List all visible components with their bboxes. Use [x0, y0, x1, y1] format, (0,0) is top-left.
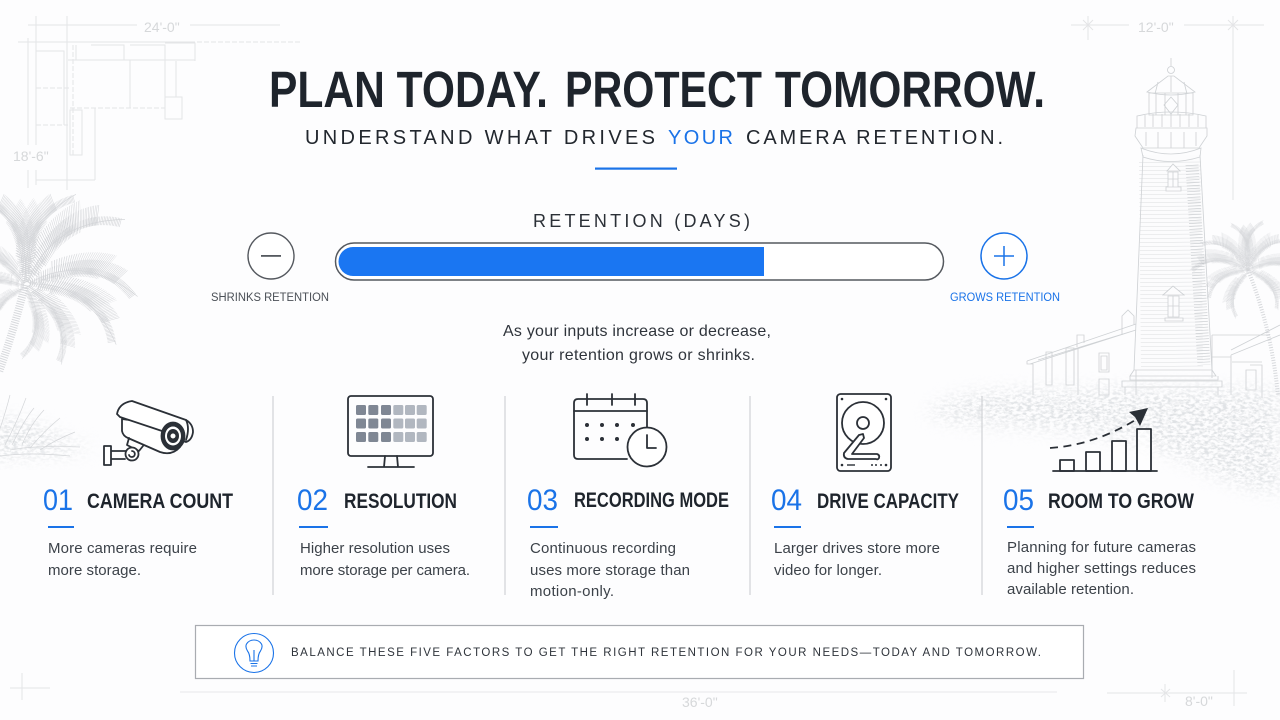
icon: security camera [104, 401, 193, 465]
blueprint sketch: bottom dimensions [10, 670, 1247, 710]
factor 5: room to grow [1003, 408, 1196, 598]
dimension: 8 feet: 8'-0" [1185, 693, 1213, 709]
title: PROTECT [565, 61, 762, 118]
factor 4: drive capacity [771, 394, 959, 579]
heading: RESOLUTION [344, 490, 457, 513]
title: TOMORROW. [775, 61, 1045, 118]
meter track [336, 243, 944, 280]
factor 3: recording mode [527, 394, 729, 600]
description: more storage. [48, 562, 141, 579]
number: 04 [771, 484, 802, 517]
meter label: RETENTION (DAYS) [533, 211, 750, 231]
icon: growth chart [1050, 408, 1157, 471]
callout banner [196, 626, 1084, 678]
explanatory text: As your inputs increase or decrease, [503, 323, 771, 340]
subtitle: YOUR [668, 127, 733, 149]
description: uses more storage than [530, 562, 690, 579]
dimension: 24 feet: 24'-0" [144, 19, 180, 35]
description [1007, 539, 1196, 598]
illustration: right palm tree [1184, 212, 1280, 396]
title accent rule [595, 168, 677, 170]
minus control [248, 233, 294, 279]
illustration: scrub ground [933, 384, 1280, 495]
factor 2: resolution [297, 396, 470, 579]
grows label: GROWS RETENTION [950, 292, 1060, 304]
explanatory text [503, 323, 771, 364]
number: 05 [1003, 484, 1034, 517]
tower [1122, 148, 1222, 395]
explanatory text: your retention grows or shrinks. [522, 347, 755, 364]
subtitle: CAMERA RETENTION. [746, 127, 1003, 149]
blueprint sketch: top left floor plan [13, 16, 300, 190]
description: motion-only. [530, 583, 614, 600]
factor 1: camera count [43, 401, 233, 579]
description: available retention. [1007, 581, 1134, 598]
dimension: 36 feet: 36'-0" [682, 694, 718, 710]
plus control [981, 233, 1027, 279]
icon: light bulb [234, 634, 274, 672]
illustration: left palm tree [0, 174, 150, 372]
title [269, 61, 1045, 118]
description: More cameras require [48, 540, 197, 557]
illustration: lighthouse and buildings [1027, 58, 1280, 398]
description [48, 540, 197, 579]
callout text: BALANCE THESE FIVE FACTORS TO GET THE RIGHT RETENTION FOR YOUR NEEDS—TODAY AND TOMORROW. [291, 647, 1041, 659]
description: Larger drives store more [774, 540, 940, 557]
title: PLAN TODAY. [269, 61, 548, 118]
icon: calendar with clock [574, 394, 666, 466]
description: more storage per camera. [300, 562, 470, 579]
subtitle [305, 127, 1003, 149]
description: Higher resolution uses [300, 540, 450, 557]
right keeper house [1212, 325, 1280, 398]
description [774, 540, 940, 579]
description: Continuous recording [530, 540, 676, 557]
heading: ROOM TO GROW [1048, 490, 1194, 513]
heading: CAMERA COUNT [87, 490, 233, 513]
left keeper house [1027, 310, 1136, 395]
number: 03 [527, 484, 558, 517]
subtitle: UNDERSTAND WHAT DRIVES [305, 127, 655, 149]
tower windows [1163, 164, 1184, 321]
description: and higher settings reduces [1007, 560, 1196, 577]
gallery [1135, 58, 1207, 148]
description: Planning for future cameras [1007, 539, 1196, 556]
shrinks label: SHRINKS RETENTION [211, 292, 329, 304]
dimension: 18 feet 6: 18'-6" [13, 148, 49, 164]
dimension: 12 feet: 12'-0" [1138, 19, 1174, 35]
retention meter [211, 211, 1060, 304]
description: video for longer. [774, 562, 882, 579]
number: 02 [297, 484, 328, 517]
meter fill [338, 247, 764, 276]
description [530, 540, 690, 600]
icon: hard drive [837, 394, 891, 471]
heading: DRIVE CAPACITY [817, 490, 959, 513]
icon: monitor with tile grid [348, 396, 433, 467]
description [300, 540, 470, 579]
number: 01 [43, 484, 73, 517]
heading: RECORDING MODE [574, 489, 729, 512]
illustration: left grasses [0, 395, 80, 463]
blueprint sketch: top right dimension [1071, 16, 1264, 200]
